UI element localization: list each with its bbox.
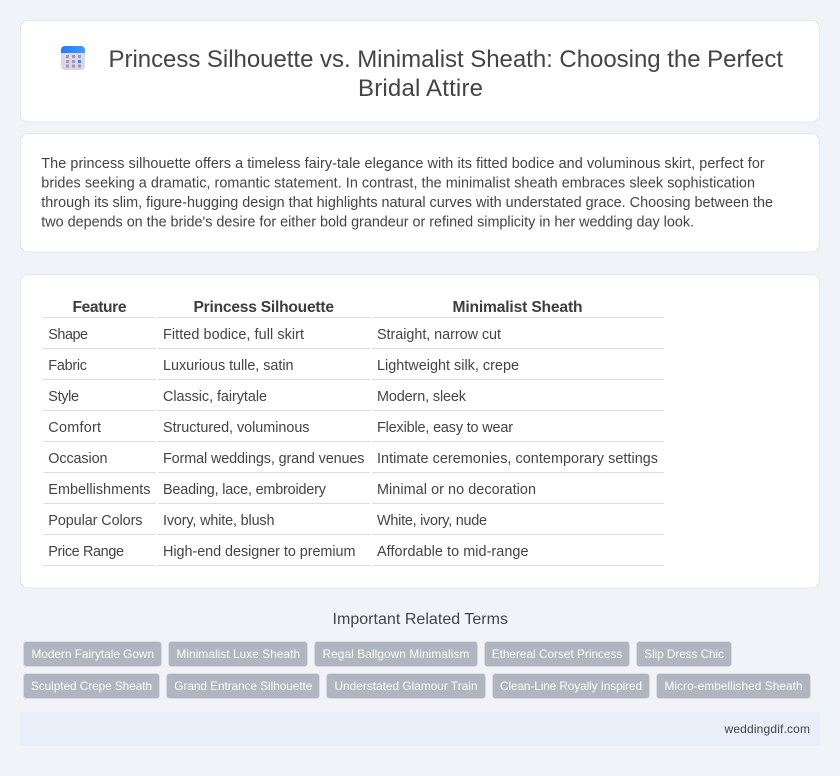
text block: introduction	[41, 156, 773, 230]
row: style: Modern, sleek	[377, 389, 467, 405]
tag	[166, 674, 320, 698]
row: occasion: Formal weddings, grand venues	[163, 451, 364, 467]
tag: Sculpted Crepe Sheath	[31, 679, 152, 693]
row: occasion	[48, 451, 658, 467]
row: style: Classic, fairytale	[163, 389, 267, 405]
heading: related terms: Important Related Terms	[332, 611, 508, 628]
text block: introduction: two depends on the bride's desire for either bold grandeur or refined simplicity in her wedding day look.	[41, 214, 694, 230]
panel: comparison table	[20, 274, 820, 588]
tag	[636, 642, 732, 666]
tag: Ethereal Corset Princess	[492, 647, 622, 661]
row: fabric: Luxurious tulle, satin	[163, 358, 294, 374]
footer source: weddingdif.com	[724, 722, 810, 736]
row: shape	[48, 327, 501, 343]
row: embellishments: Embellishments	[48, 482, 150, 498]
tag: Minimalist Luxe Sheath	[176, 647, 300, 661]
row: popular colors	[48, 513, 487, 529]
row: popular colors: Popular Colors	[48, 513, 142, 529]
row: price range: Affordable to mid-range	[377, 544, 528, 560]
row: comfort: Flexible, easy to wear	[377, 420, 513, 436]
title	[108, 46, 783, 102]
tag	[656, 674, 810, 698]
row: popular colors: Ivory, white, blush	[163, 513, 274, 529]
tag: Slip Dress Chic	[644, 647, 724, 661]
row: occasion: Occasion	[48, 451, 108, 467]
title: Bridal Attire	[358, 75, 483, 102]
icon: calendar	[61, 46, 85, 70]
tag	[492, 674, 650, 698]
table header: Minimalist Sheath	[452, 299, 582, 316]
row: style	[48, 389, 467, 405]
row: price range: Price Range	[48, 544, 124, 560]
panel: header	[20, 20, 820, 122]
tag	[314, 642, 478, 666]
row: shape: Shape	[48, 327, 88, 343]
row: embellishments: Beading, lace, embroidery	[163, 482, 327, 498]
row: fabric: Lightweight silk, crepe	[377, 358, 519, 374]
tag: Understated Glamour Train	[334, 679, 478, 693]
tags: related terms	[24, 642, 810, 698]
text block: introduction: The princess silhouette offers a timeless fairy-tale elegance with its fitted bodice and voluminous skirt, perfect for	[41, 156, 765, 172]
row: shape: Straight, narrow cut	[377, 327, 501, 343]
row: comfort	[48, 420, 513, 436]
row: price range: High-end designer to premium	[163, 544, 356, 560]
row: shape: Fitted bodice, full skirt	[163, 327, 304, 343]
text block: introduction: brides seeking a dramatic, romantic statement. In contrast, the minimalist sheath embraces sleek sophistication	[41, 176, 755, 192]
row: embellishments: Minimal or no decoration	[377, 482, 536, 498]
row: comfort: Comfort	[48, 420, 101, 436]
tag: Grand Entrance Silhouette	[174, 679, 313, 693]
tag: Clean-Line Royally Inspired	[500, 679, 642, 693]
footer	[20, 712, 820, 746]
row: occasion: Intimate ceremonies, contemporary settings	[377, 451, 658, 467]
row: embellishments	[48, 482, 536, 498]
title: Princess Silhouette vs. Minimalist Sheath: Choosing the Perfect	[108, 46, 783, 73]
text block: introduction: through its slim, figure-hugging design that highlights natural curves with understated grace. Choosing between the	[41, 195, 773, 211]
tag	[24, 642, 162, 666]
row: price range	[48, 544, 529, 560]
row: fabric	[48, 358, 519, 374]
row: fabric: Fabric	[48, 358, 87, 374]
row: comfort: Structured, voluminous	[163, 420, 310, 436]
row: style: Style	[48, 389, 79, 405]
tag	[168, 642, 308, 666]
tag	[326, 674, 486, 698]
tag: Regal Ballgown Minimalism	[322, 647, 469, 661]
table header	[72, 299, 582, 316]
table header: Princess Silhouette	[194, 299, 334, 316]
tag: Micro-embellished Sheath	[664, 679, 802, 693]
tag	[24, 674, 160, 698]
tag: Modern Fairytale Gown	[32, 647, 154, 661]
panel: introduction	[20, 134, 820, 252]
tag	[484, 642, 630, 666]
table header: Feature	[72, 299, 127, 316]
row: popular colors: White, ivory, nude	[377, 513, 487, 529]
